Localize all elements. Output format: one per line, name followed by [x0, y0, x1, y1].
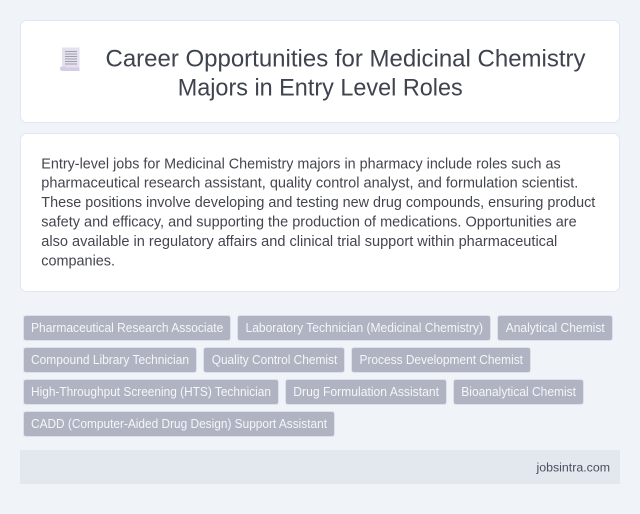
panel: header: [20, 20, 620, 122]
text block: description: pharmaceutical research assistant, quality control analyst, and formulation scientist.: [41, 176, 578, 192]
tag: Analytical Chemist: [498, 316, 612, 340]
tag: Quality Control Chemist: [204, 348, 344, 372]
tag: Compound Library Technician: Compound Library Technician: [31, 353, 189, 367]
tag: Drug Formulation Assistant: Drug Formulation Assistant: [293, 385, 439, 399]
tag: High-Throughput Screening (HTS) Technician: High-Throughput Screening (HTS) Technician: [31, 385, 271, 399]
tag: Laboratory Technician (Medicinal Chemistry): Laboratory Technician (Medicinal Chemistry): [246, 321, 483, 335]
tag: Process Development Chemist: [352, 348, 530, 372]
text block: description: These positions involve developing and testing new drug compounds, ensuring product: [41, 195, 595, 211]
tag: Compound Library Technician: [24, 348, 196, 372]
tag: CADD (Computer-Aided Drug Design) Support Assistant: [24, 412, 334, 436]
tag: Pharmaceutical Research Associate: Pharmaceutical Research Associate: [31, 321, 223, 335]
tag: Bioanalytical Chemist: Bioanalytical Chemist: [461, 385, 576, 399]
tag: Pharmaceutical Research Associate: [24, 316, 230, 340]
title: Majors in Entry Level Roles: [178, 75, 463, 102]
text block: description: safety and efficacy, and supporting the production of medications. Opportunities are: [41, 214, 577, 230]
panel: description: [20, 134, 620, 292]
icon: document scroll: [60, 48, 80, 71]
text block: description: also available in regulatory affairs and clinical trial support within pharmaceutical: [41, 234, 557, 250]
title: Career Opportunities for Medicinal Chemistry: [106, 46, 586, 73]
title: [106, 46, 586, 102]
footer source text: jobsintra.com: [536, 461, 610, 475]
text block: description: [41, 156, 595, 269]
tag group: job roles: [24, 316, 612, 436]
tag: Process Development Chemist: Process Development Chemist: [360, 353, 523, 367]
tag: Analytical Chemist: Analytical Chemist: [506, 321, 605, 335]
tag: Laboratory Technician (Medicinal Chemistry): [238, 316, 490, 340]
tag: Quality Control Chemist: Quality Control Chemist: [212, 353, 338, 367]
text block: description: Entry-level jobs for Medicinal Chemistry majors in pharmacy include roles such as: [41, 156, 561, 172]
tag: CADD (Computer-Aided Drug Design) Support Assistant: CADD (Computer-Aided Drug Design) Support Assistant: [31, 417, 327, 431]
text block: description: companies.: [41, 253, 115, 269]
footer: [20, 450, 620, 484]
tag: Bioanalytical Chemist: [454, 380, 584, 404]
tag: High-Throughput Screening (HTS) Technician: [24, 380, 278, 404]
tag: Drug Formulation Assistant: [286, 380, 446, 404]
